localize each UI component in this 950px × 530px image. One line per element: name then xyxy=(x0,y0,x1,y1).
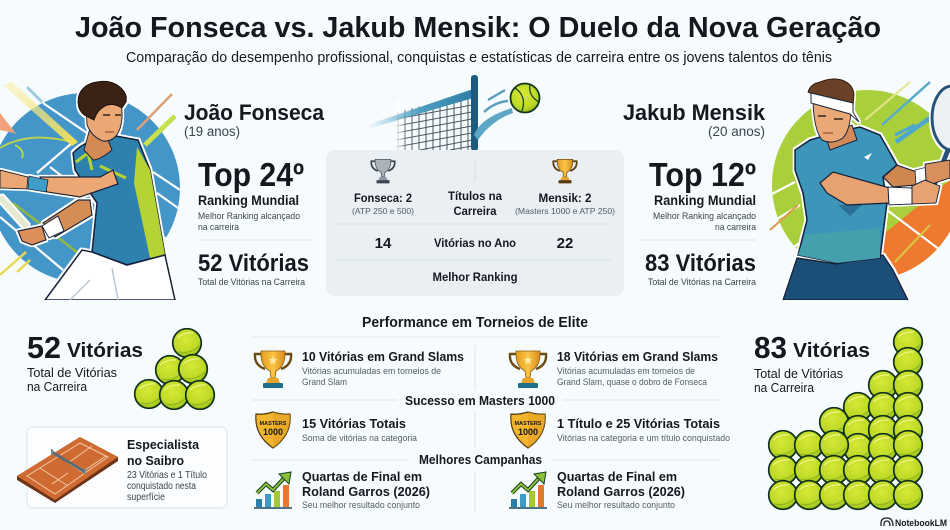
neck and head xyxy=(825,125,857,150)
Mensik titles: Mensik: 2 xyxy=(538,191,592,205)
lower arm xyxy=(43,200,92,237)
shirt xyxy=(795,127,897,263)
Fonseca wins stat: 52 Vitórias xyxy=(198,250,309,277)
row label: career titles: Carreira xyxy=(454,204,497,218)
player name: João Fonseca: João Fonseca xyxy=(184,100,325,125)
Fonseca Masters row xyxy=(256,412,418,448)
Mensik Grand Slam row xyxy=(510,349,718,388)
back arm xyxy=(883,165,917,187)
row: best ranking: Melhor Ranking xyxy=(432,270,518,284)
icon: tennis ball xyxy=(510,84,540,112)
Fonseca campaign row: Seu melhor resultado conjunto xyxy=(302,500,420,511)
Mensik Grand Slam row: Grand Slam, quase o dobro de Fonseca xyxy=(557,377,708,388)
white wristband xyxy=(42,216,64,238)
row: wins this year xyxy=(375,235,573,252)
Fonseca Masters row: 15 Vitórias Totais xyxy=(302,416,406,431)
Mensik titles xyxy=(515,191,615,216)
heading: Masters 1000 success: Sucesso em Masters 1000 xyxy=(405,393,555,408)
Mensik ranking stat: Melhor Ranking alcançado xyxy=(653,211,756,222)
Mensik ranking stat: Ranking Mundial xyxy=(654,192,756,208)
Mensik ranking stat xyxy=(649,156,757,233)
Fonseca Grand Slam row: 10 Vitórias em Grand Slams xyxy=(302,349,464,364)
Mensik wins stat xyxy=(645,250,757,288)
stat: 83 wins: Vitórias xyxy=(793,340,870,362)
stat: 83 wins: Total de Vitórias xyxy=(754,366,843,381)
Fonseca wins stat xyxy=(198,250,309,288)
stat: 52 wins: 52 xyxy=(27,330,61,365)
row: wins this year: Vitórias no Ano xyxy=(434,236,516,250)
Fonseca ranking stat: Melhor Ranking alcançado xyxy=(198,211,300,222)
icon: growth chart xyxy=(509,472,547,508)
Fonseca Grand Slam row: Grand Slam xyxy=(302,377,347,388)
card text xyxy=(127,437,207,503)
icon: stack of 83 tennis balls xyxy=(769,328,922,509)
Mensik Masters row: 1 Título e 25 Vitórias Totais xyxy=(557,416,720,431)
Mensik Masters row xyxy=(511,412,730,448)
Mensik campaign row: Seu melhor resultado conjunto xyxy=(557,500,675,511)
Fonseca Grand Slam row: Vitórias acumuladas em torneios de xyxy=(302,366,441,377)
card text: conquistado nesta xyxy=(127,481,196,492)
Mensik ranking stat: na carreira xyxy=(715,222,757,233)
front arm xyxy=(40,170,118,197)
stat: 52 wins: Total de Vitórias xyxy=(27,365,117,380)
Mensik campaign row xyxy=(509,469,685,511)
icon: pile of 52 tennis balls xyxy=(135,329,214,409)
Fonseca Masters row: Soma de vitórias na categoria xyxy=(302,433,418,444)
Mensik campaign row: Quartas de Final em xyxy=(557,469,677,484)
Fonseca titles xyxy=(352,191,414,216)
stat: 83 wins: na Carreira xyxy=(754,380,815,395)
Fonseca titles: (ATP 250 e 500) xyxy=(352,206,414,216)
Fonseca ranking stat: Top 24º xyxy=(198,156,304,193)
player name: Jakub Mensik: Jakub Mensik xyxy=(623,100,766,125)
stat: 83 wins xyxy=(754,330,870,395)
row label: career titles: Títulos na xyxy=(448,189,502,203)
shorts xyxy=(783,255,908,300)
Mensik titles: (Masters 1000 e ATP 250) xyxy=(515,206,615,216)
card: clay specialist xyxy=(17,427,227,508)
illustration: João Fonseca xyxy=(0,81,180,300)
Fonseca ranking stat: na carreira xyxy=(198,222,240,233)
Mensik Grand Slam row: Vitórias acumuladas em torneios de xyxy=(557,366,695,377)
icon: growth chart xyxy=(254,472,292,508)
icon: clay court xyxy=(17,437,118,503)
front arm xyxy=(820,172,890,205)
stat: 52 wins xyxy=(27,330,143,394)
headband xyxy=(811,93,859,122)
icon: Masters 1000 shield xyxy=(511,412,545,448)
icon: trophy xyxy=(255,351,291,388)
card text: Especialista xyxy=(127,437,200,452)
Mensik wins stat: Total de Vitórias na Carreira xyxy=(648,277,757,288)
Mensik ranking stat: Top 12º xyxy=(649,156,756,193)
Fonseca titles: Fonseca: 2 xyxy=(354,191,412,205)
stat: 52 wins: na Carreira xyxy=(27,379,88,394)
heading: elite tournament performance: Performance em Torneios de Elite xyxy=(362,314,588,331)
panel: career comparison xyxy=(326,150,624,296)
icon: gold trophy xyxy=(553,159,577,183)
illustration: Jakub Mensik xyxy=(770,79,950,300)
neck and head xyxy=(84,128,112,160)
Mensik campaign row: Roland Garros (2026) xyxy=(557,484,685,499)
card text: superfície xyxy=(127,492,165,503)
shorts xyxy=(45,250,175,300)
shirt xyxy=(73,135,165,265)
icon: Masters 1000 shield: MASTERS xyxy=(515,421,542,427)
row: wins this year: 14 xyxy=(375,235,392,252)
title: João Fonseca vs. Jakub Mensik: O Duelo da Nova Geração xyxy=(75,12,881,44)
Fonseca ranking stat: Ranking Mundial xyxy=(198,192,299,208)
icon: Masters 1000 shield: 1000 xyxy=(518,427,538,437)
Fonseca Grand Slam row xyxy=(255,349,464,388)
Mensik Masters row: Vitórias na categoria e um título conquistado xyxy=(557,433,730,444)
blue wristband xyxy=(28,176,48,192)
player age: (20 anos) xyxy=(708,124,765,139)
Fonseca ranking stat xyxy=(198,156,304,233)
upper hand xyxy=(0,170,28,189)
Fonseca campaign row: Quartas de Final em xyxy=(302,469,422,484)
Fonseca campaign row: Roland Garros (2026) xyxy=(302,484,430,499)
Mensik wins stat: 83 Vitórias xyxy=(645,250,756,277)
Fonseca wins stat: Total de Vitórias na Carreira xyxy=(198,277,306,288)
icon: trophy xyxy=(510,351,546,388)
lower hand xyxy=(18,226,46,245)
stat: 83 wins: 83 xyxy=(754,330,787,365)
stat: 52 wins: Vitórias xyxy=(67,340,143,362)
subtitle: Comparação do desempenho profissional, conquistas e estatísticas de carreira entre os jovens talentos do tênis xyxy=(126,49,832,66)
icon: Masters 1000 shield xyxy=(256,412,290,448)
Mensik Grand Slam row: 18 Vitórias em Grand Slams xyxy=(557,349,718,364)
icon: Masters 1000 shield: MASTERS xyxy=(260,421,287,427)
Fonseca campaign row xyxy=(254,469,430,511)
card text: no Saibro xyxy=(127,453,184,468)
card text: 23 Vitórias e 1 Título xyxy=(127,470,207,481)
racket xyxy=(932,86,950,150)
icon: silver trophy xyxy=(371,159,395,183)
racket handle xyxy=(0,197,27,227)
heading: best campaigns: Melhores Campanhas xyxy=(419,452,542,467)
row: wins this year: 22 xyxy=(557,235,573,252)
net and ball illustration xyxy=(367,75,540,151)
icon: Masters 1000 shield: 1000 xyxy=(263,427,283,437)
row label: career titles xyxy=(448,189,502,218)
player age: (19 anos) xyxy=(184,124,240,139)
